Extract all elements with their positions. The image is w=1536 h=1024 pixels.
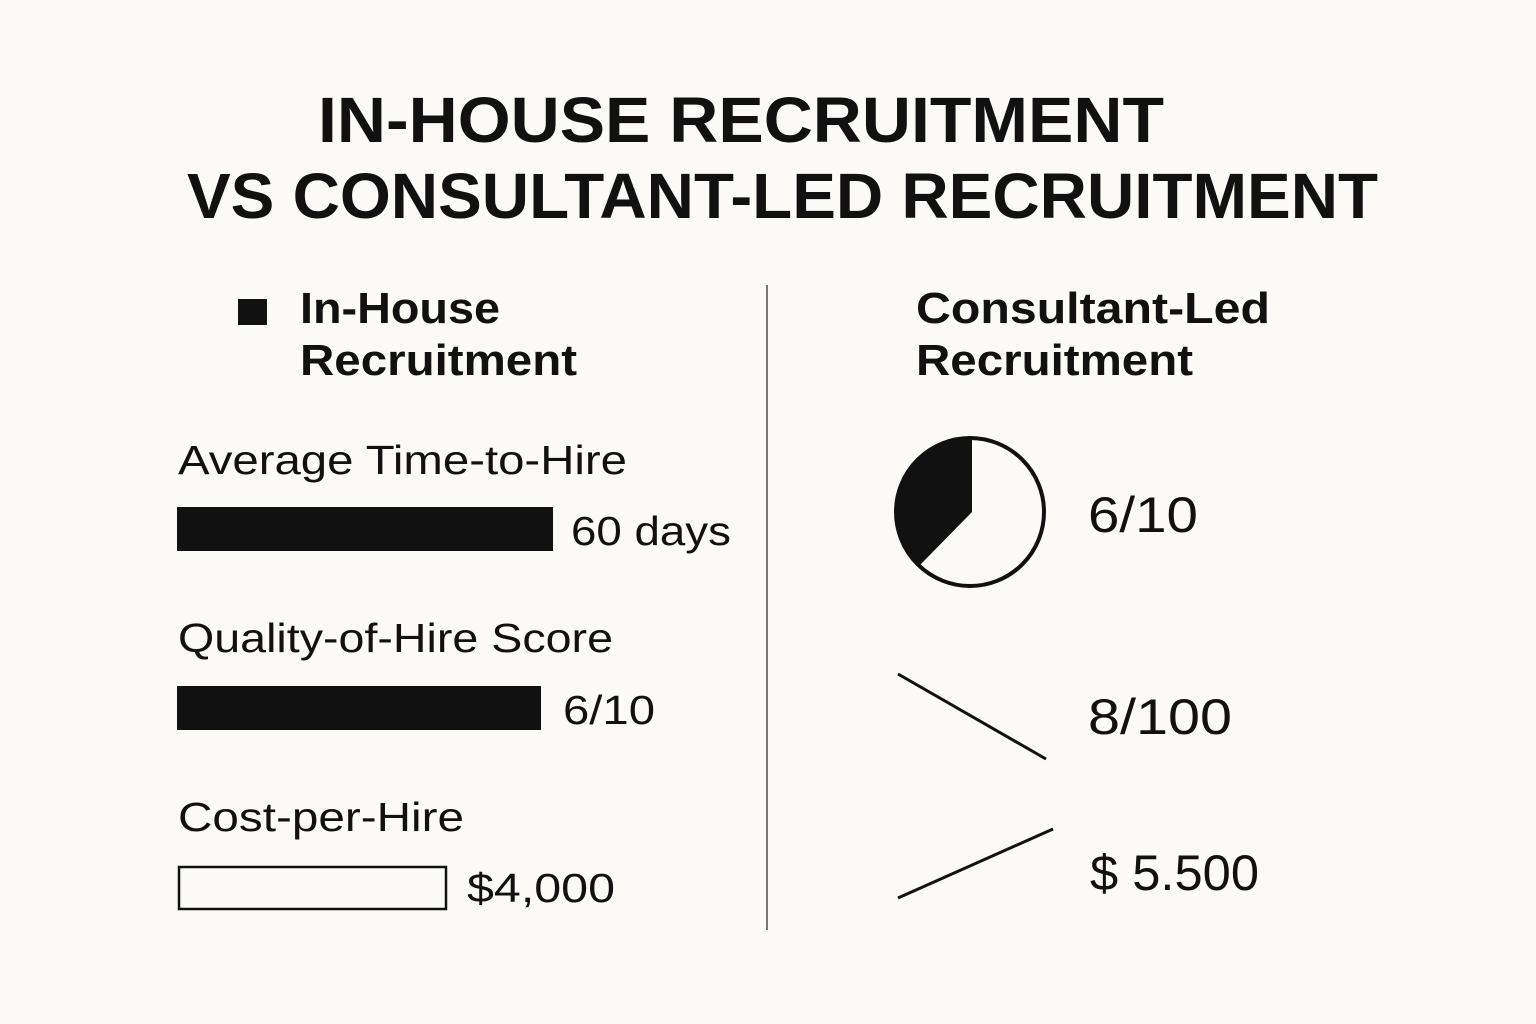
- metric: quality-of-hire: [177, 615, 655, 733]
- value: 8/100: 8/100: [1088, 689, 1232, 745]
- pie chart: [896, 438, 1044, 586]
- metric: average time-to-hire: 60 days: [571, 508, 731, 554]
- title: IN-HOUSE RECRUITMENT: [318, 84, 1164, 156]
- heading: consultant-led: Recruitment: [916, 336, 1193, 385]
- heading: consultant-led: Consultant-Led: [916, 284, 1270, 333]
- value: cost: $ 5.500: [1090, 845, 1259, 901]
- line: up: [898, 829, 1053, 898]
- title: VS CONSULTANT-LED RECRUITMENT: [187, 160, 1378, 232]
- line: down: [898, 674, 1046, 759]
- metric: average time-to-hire: [177, 437, 731, 554]
- legend heading: in-house: In-House: [300, 284, 500, 333]
- panel: consultant-led: [896, 284, 1270, 901]
- metric: quality-of-hire: 6/10: [563, 687, 655, 733]
- value: 6/10: 6/10: [1088, 487, 1198, 543]
- panel: in-house: [177, 284, 731, 911]
- metric: quality-of-hire: Quality-of-Hire Score: [178, 615, 613, 661]
- metric: cost-per-hire: $4,000: [467, 865, 615, 911]
- metric: cost-per-hire: Cost-per-Hire: [178, 794, 464, 840]
- metric: cost-per-hire: [178, 794, 615, 911]
- legend heading: in-house: Recruitment: [300, 336, 577, 385]
- heading: consultant-led: [916, 284, 1270, 385]
- title: [187, 84, 1378, 232]
- legend heading: in-house: [238, 284, 577, 385]
- metric: average time-to-hire: Average Time-to-Hire: [178, 437, 627, 483]
